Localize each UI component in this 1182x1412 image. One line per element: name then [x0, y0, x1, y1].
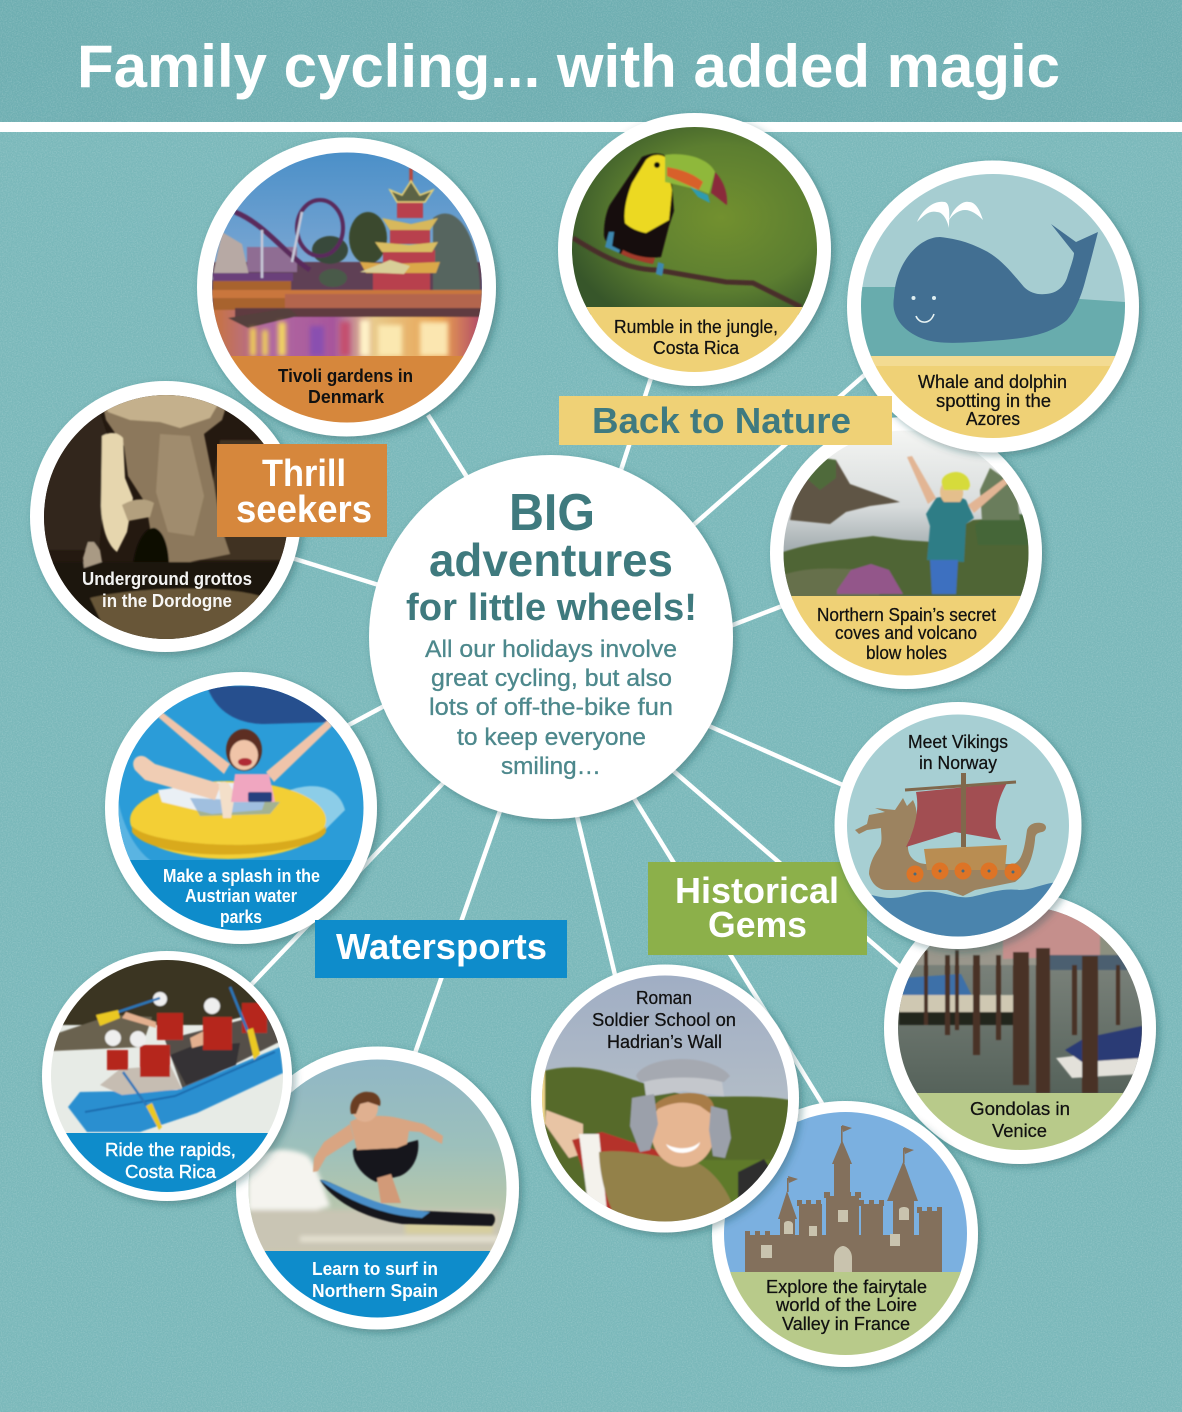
icon: water spout — [917, 202, 983, 228]
caption: Tivoli — [278, 366, 413, 407]
caption: gondolas: Gondolas in — [970, 1099, 1070, 1119]
caption: Tivoli: Tivoli gardens in — [278, 366, 413, 386]
caption: Roman: Soldier School on — [592, 1010, 736, 1030]
caption: Spain: coves and volcano — [835, 623, 977, 643]
label: Back to Nature — [559, 396, 892, 445]
label: Thrill seekers: seekers — [236, 489, 372, 531]
intro text — [425, 636, 677, 780]
intro text: great cycling, but also — [431, 665, 672, 692]
sea — [855, 287, 1125, 358]
caption band: toucan — [586, 307, 803, 372]
caption band: surf — [264, 1251, 490, 1318]
circle: Roman Soldier School — [531, 964, 799, 1232]
circle: Gondolas in Venice — [884, 892, 1156, 1164]
circle: Explore the fairytale Loire — [712, 1101, 978, 1367]
caption: surf: Learn to surf in — [312, 1259, 438, 1279]
caption: Roman: Hadrian’s Wall — [607, 1032, 722, 1052]
intro text: All our holidays involve — [425, 636, 677, 663]
caption: whale: Azores — [966, 409, 1020, 429]
caption: Vikings: Meet Vikings — [908, 732, 1008, 752]
label: Thrill seekers: Thrill — [262, 453, 346, 495]
icon: whale — [893, 224, 1098, 343]
caption: rapids — [105, 1140, 236, 1182]
caption: rapids: Ride the rapids, — [105, 1140, 236, 1160]
caption: Roman — [592, 988, 736, 1052]
central circle — [369, 455, 733, 819]
caption: Spain — [817, 605, 996, 663]
heading: BIG adventures: for little wheels! — [406, 587, 697, 629]
intro text: smiling… — [501, 753, 601, 780]
label: Thrill seekers — [217, 444, 387, 537]
caption: Tivoli: Denmark — [308, 387, 385, 407]
waves — [872, 882, 1054, 936]
caption: surf: Northern Spain — [312, 1281, 438, 1301]
circle: Tivoli gardens in Denmark — [197, 138, 496, 436]
icon: viking ship — [855, 773, 1046, 896]
caption: castle: world of the Loire — [775, 1295, 917, 1315]
caption band: castle — [730, 1272, 961, 1355]
heading: BIG adventures — [406, 484, 697, 629]
intro text: to keep everyone — [457, 724, 646, 751]
caption band: gondolas — [916, 1093, 1124, 1150]
caption: Vikings: in Norway — [919, 753, 997, 773]
caption: grottos: Underground grottos — [82, 569, 252, 589]
caption band: splash — [130, 860, 352, 930]
heading: BIG adventures: BIG — [509, 484, 595, 542]
circle: Underground grottos in the Dordogne — [30, 381, 301, 652]
caption: Spain: Northern Spain’s secret — [817, 605, 996, 625]
caption: surf — [312, 1259, 438, 1301]
circle: Rumble in the jungle — [558, 113, 831, 386]
caption: gondolas — [970, 1099, 1070, 1141]
heading: BIG adventures: adventures — [429, 534, 673, 586]
connector lines — [250, 372, 900, 1105]
circle: Learn to surf — [236, 1046, 519, 1330]
caption: grottos — [82, 569, 252, 611]
caption: toucan: Costa Rica — [653, 338, 740, 358]
label: Back to Nature: Back to Nature — [592, 400, 851, 441]
intro text: lots of off-the-bike fun — [429, 694, 673, 721]
label: Historical Gems: Gems — [708, 904, 807, 945]
label: Watersports — [315, 920, 567, 978]
caption: castle: Explore the fairytale — [766, 1277, 927, 1297]
caption: whale — [918, 372, 1067, 429]
caption: whale: Whale and dolphin — [918, 372, 1067, 392]
caption: whale: spotting in the — [936, 391, 1051, 411]
sand — [870, 356, 1116, 438]
caption: toucan: Rumble in the jungle, — [614, 317, 778, 337]
caption: splash — [163, 866, 320, 927]
circle: Whale and dolphin spotting — [847, 160, 1139, 452]
caption: rapids: Costa Rica — [125, 1162, 217, 1182]
circle: Northern Spain's secret coves — [770, 417, 1042, 689]
circle: Make a splash — [105, 672, 377, 944]
caption: castle — [766, 1277, 927, 1334]
caption: toucan — [614, 317, 778, 358]
caption: castle: Valley in France — [782, 1314, 910, 1334]
caption: Spain: blow holes — [866, 643, 947, 663]
caption: Roman: Roman — [636, 988, 692, 1008]
caption: grottos: in the Dordogne — [102, 591, 232, 611]
header rule — [0, 122, 1182, 132]
caption: splash: Austrian water — [185, 886, 297, 906]
caption band: Tivoli — [230, 356, 464, 422]
caption: gondolas: Venice — [992, 1121, 1047, 1141]
circle: Meet Vikings — [834, 702, 1082, 952]
icon: castle — [745, 1125, 942, 1272]
caption band: Spain — [791, 596, 1021, 676]
caption band: rapids — [66, 1133, 268, 1192]
caption: splash: parks — [220, 907, 262, 927]
caption: Vikings — [908, 732, 1008, 773]
label: Watersports: Watersports — [336, 926, 547, 967]
label: Historical Gems — [648, 862, 867, 955]
circle: Ride the rapids — [42, 951, 292, 1201]
caption: splash: Make a splash in the — [163, 866, 320, 886]
title: Family cycling... with added magic — [77, 33, 1060, 100]
label: Historical Gems: Historical — [675, 870, 839, 911]
